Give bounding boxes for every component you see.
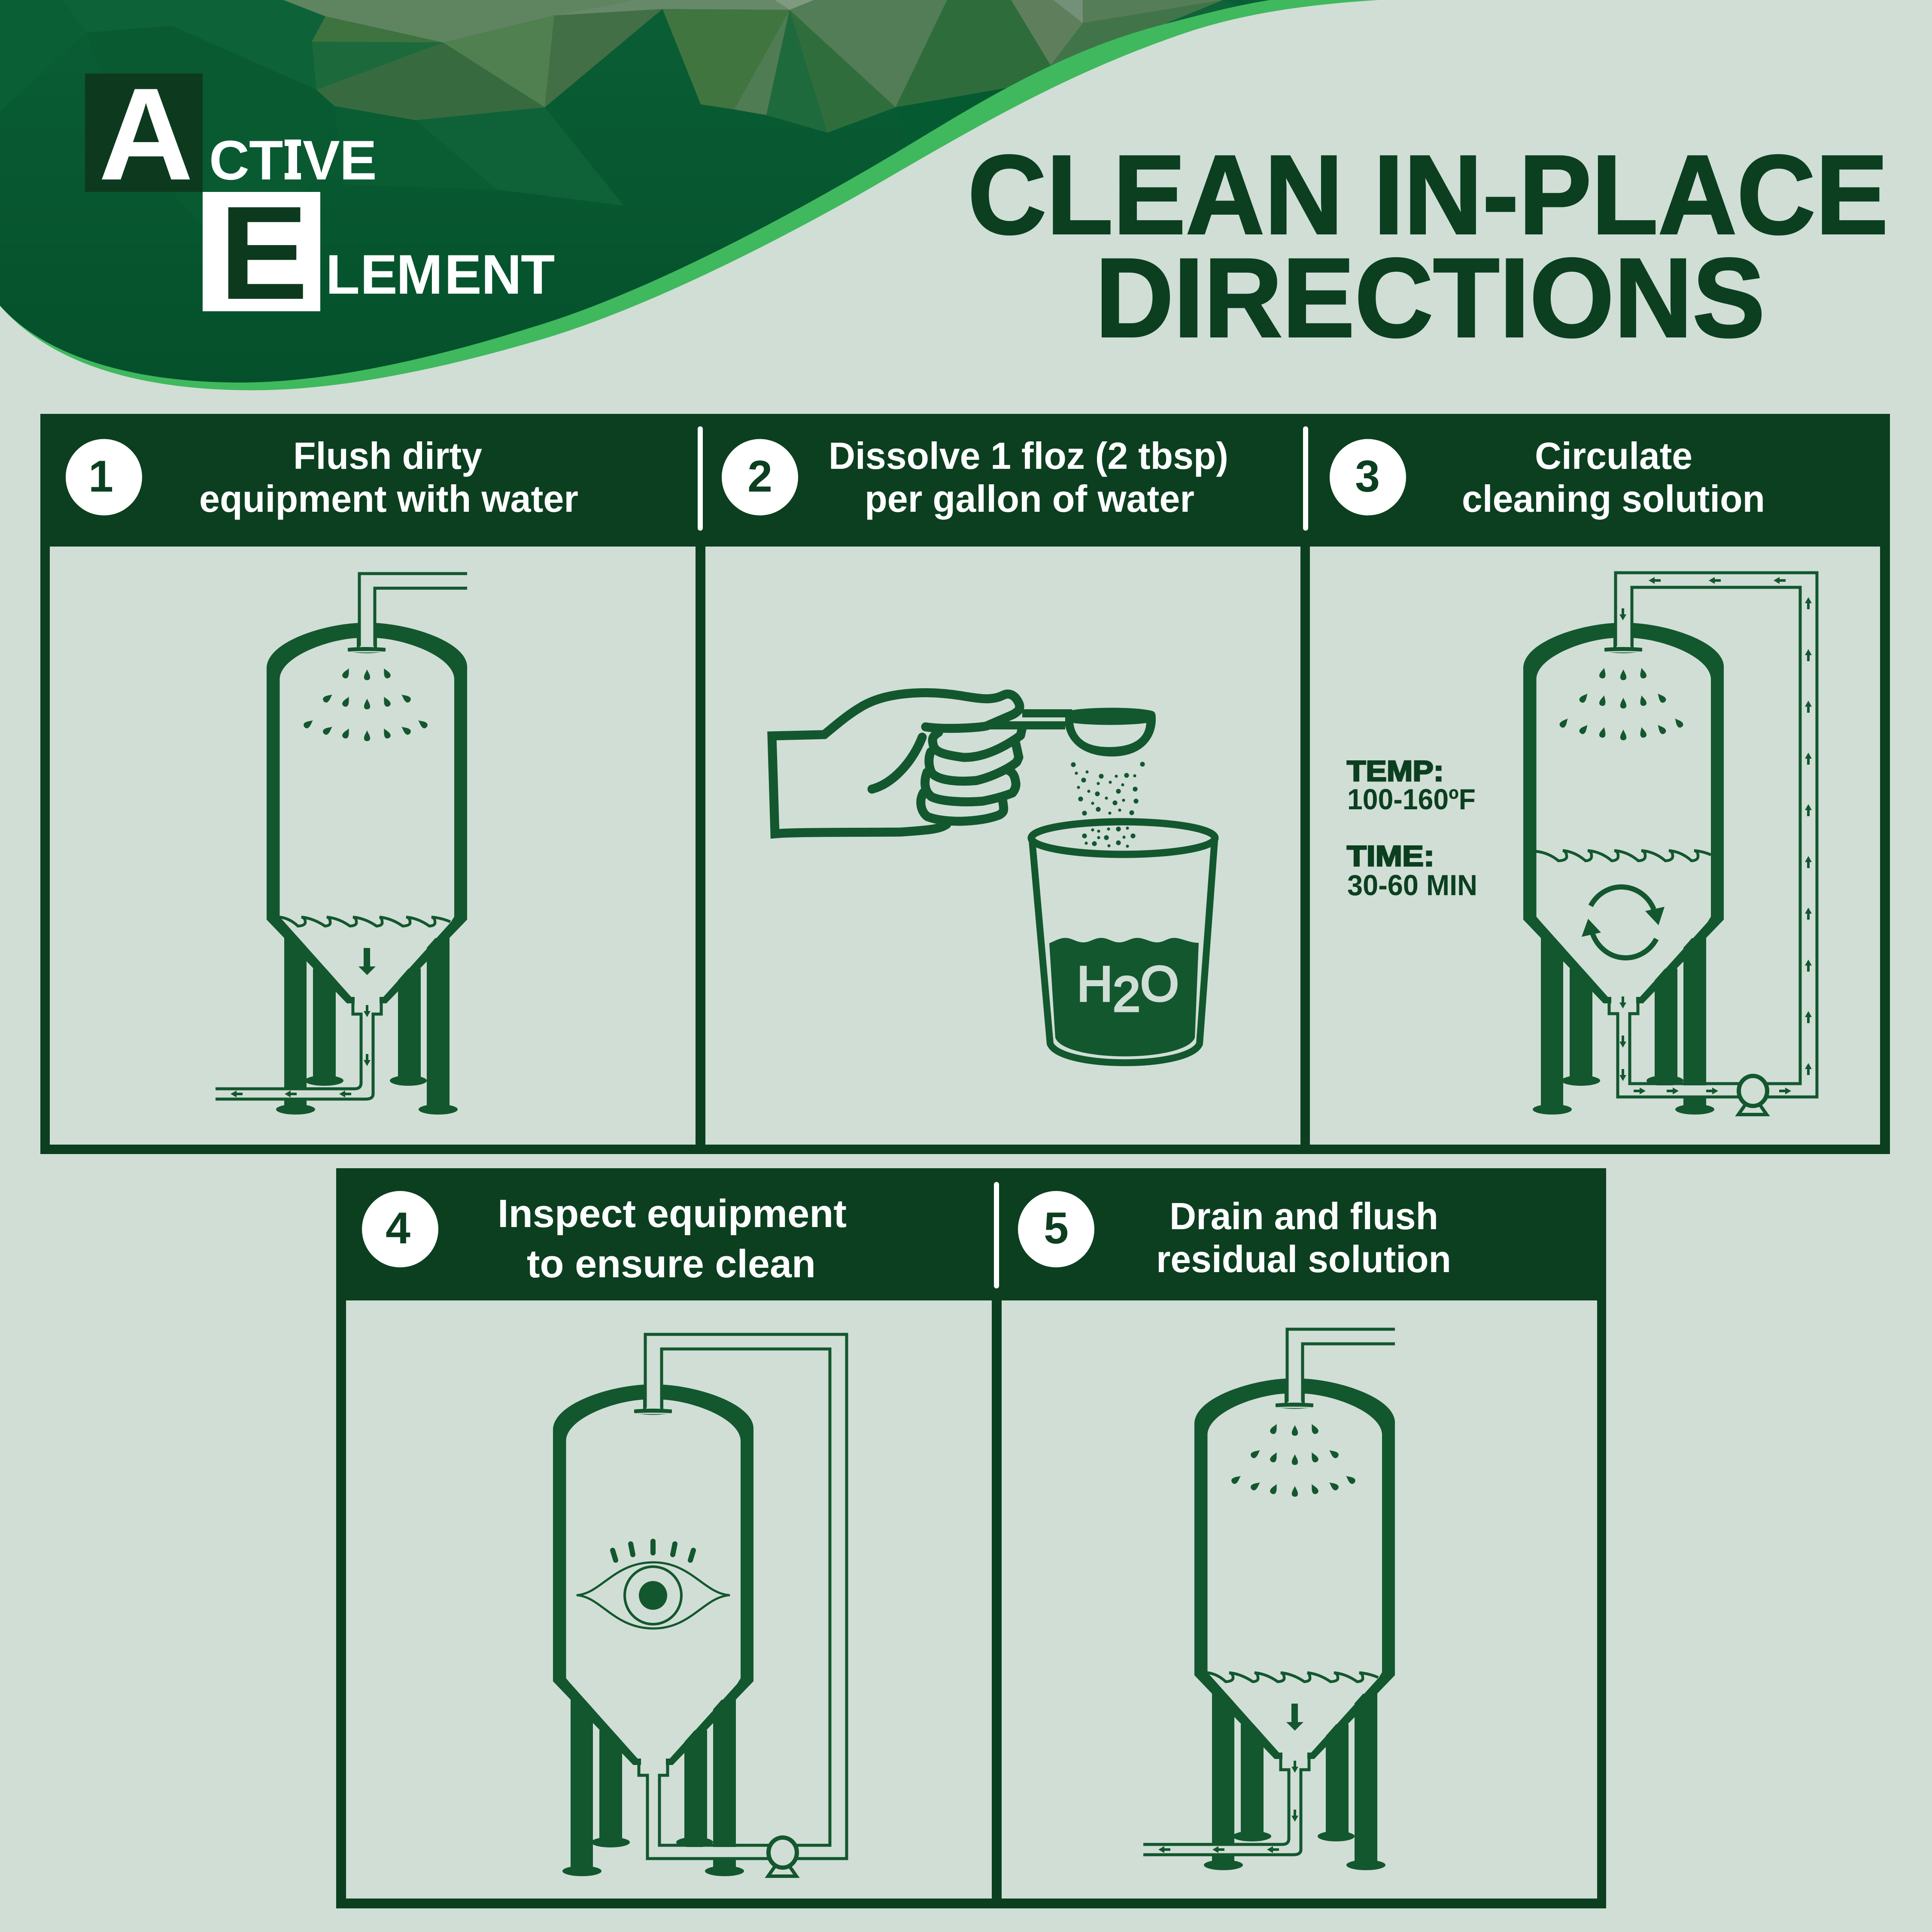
logo: Active Element: A	[99, 61, 193, 207]
step 1 header: equipment with water	[199, 477, 578, 520]
header swoosh	[0, 0, 1379, 395]
step 4 header: 4	[386, 1203, 410, 1253]
step 1 header: 1	[88, 452, 113, 501]
step 3 temperature and time text: TIME:	[1347, 840, 1434, 872]
step 5 header: 5	[1044, 1203, 1069, 1253]
solution surface wave	[1536, 851, 1711, 861]
step 2 illustration: scoop into glass	[772, 693, 1215, 1063]
logo: Active Element	[85, 61, 555, 327]
step 4 illustration: tank with inspection eye	[553, 1334, 847, 1876]
step 2 header: Dissolve 1 floz (2 tbsp)	[829, 434, 1228, 477]
step 1 illustration: tank flushing with water	[216, 574, 467, 1115]
icon: falling powder	[1071, 762, 1145, 848]
step 3 illustration: circulating tank	[1523, 573, 1817, 1115]
logo: Active Element: E	[219, 178, 308, 327]
step 3 header: cleaning solution	[1462, 477, 1765, 520]
panel frame: top row	[40, 414, 1890, 1154]
swoosh: polygon texture	[0, 0, 1288, 395]
step 1 header: Flush dirty	[293, 434, 482, 477]
step 2 header: per gallon of water	[865, 477, 1194, 520]
logo: word CTIVE: CTIVE	[209, 129, 377, 191]
title: DIRECTIONS	[1095, 235, 1765, 361]
icon: circulation arrows	[1582, 887, 1665, 958]
step 3 header: 3	[1355, 452, 1380, 501]
step 3 temperature and time text	[1347, 755, 1477, 902]
spray drops	[1558, 667, 1684, 740]
title: CLEAN IN-PLACE	[968, 132, 1888, 258]
icon: eye	[577, 1541, 730, 1628]
step 3 temperature and time text: 30-60 MIN	[1347, 869, 1477, 902]
logo: E block	[203, 192, 320, 311]
step 1 header	[66, 434, 578, 520]
step 2 header: 2	[747, 452, 772, 501]
step 5 header	[1018, 1191, 1451, 1280]
title	[968, 132, 1888, 361]
icon: scoop	[987, 708, 1156, 756]
icon: hand holding scoop	[772, 693, 1022, 834]
label: H2O: H2O	[1077, 957, 1179, 1022]
step 4 header: Inspect equipment	[498, 1192, 847, 1236]
step 5 header: Drain and flush	[1170, 1195, 1438, 1237]
panel frame: bottom row	[336, 1168, 1606, 1908]
step 3 header	[1330, 434, 1765, 520]
step 3 header: Circulate	[1535, 434, 1692, 477]
icon: water in glass	[1049, 938, 1199, 1056]
step 3 temperature and time text: TEMP:	[1347, 755, 1444, 787]
icon: glass	[1031, 822, 1215, 1063]
step 3 temperature and time text: 100-160ºF	[1347, 783, 1476, 816]
logo: A block	[85, 73, 203, 192]
swoosh: bright green edge	[0, 0, 1379, 390]
step 4 header: to ensure clean	[527, 1242, 816, 1286]
logo: word LEMENT: LEMENT	[325, 243, 555, 306]
step 5 header: residual solution	[1156, 1238, 1451, 1280]
step 4 header	[362, 1191, 847, 1286]
step 5 illustration: tank draining	[1143, 1329, 1395, 1870]
step 2 header	[722, 434, 1228, 520]
flow arrows along loop	[1619, 577, 1812, 1094]
